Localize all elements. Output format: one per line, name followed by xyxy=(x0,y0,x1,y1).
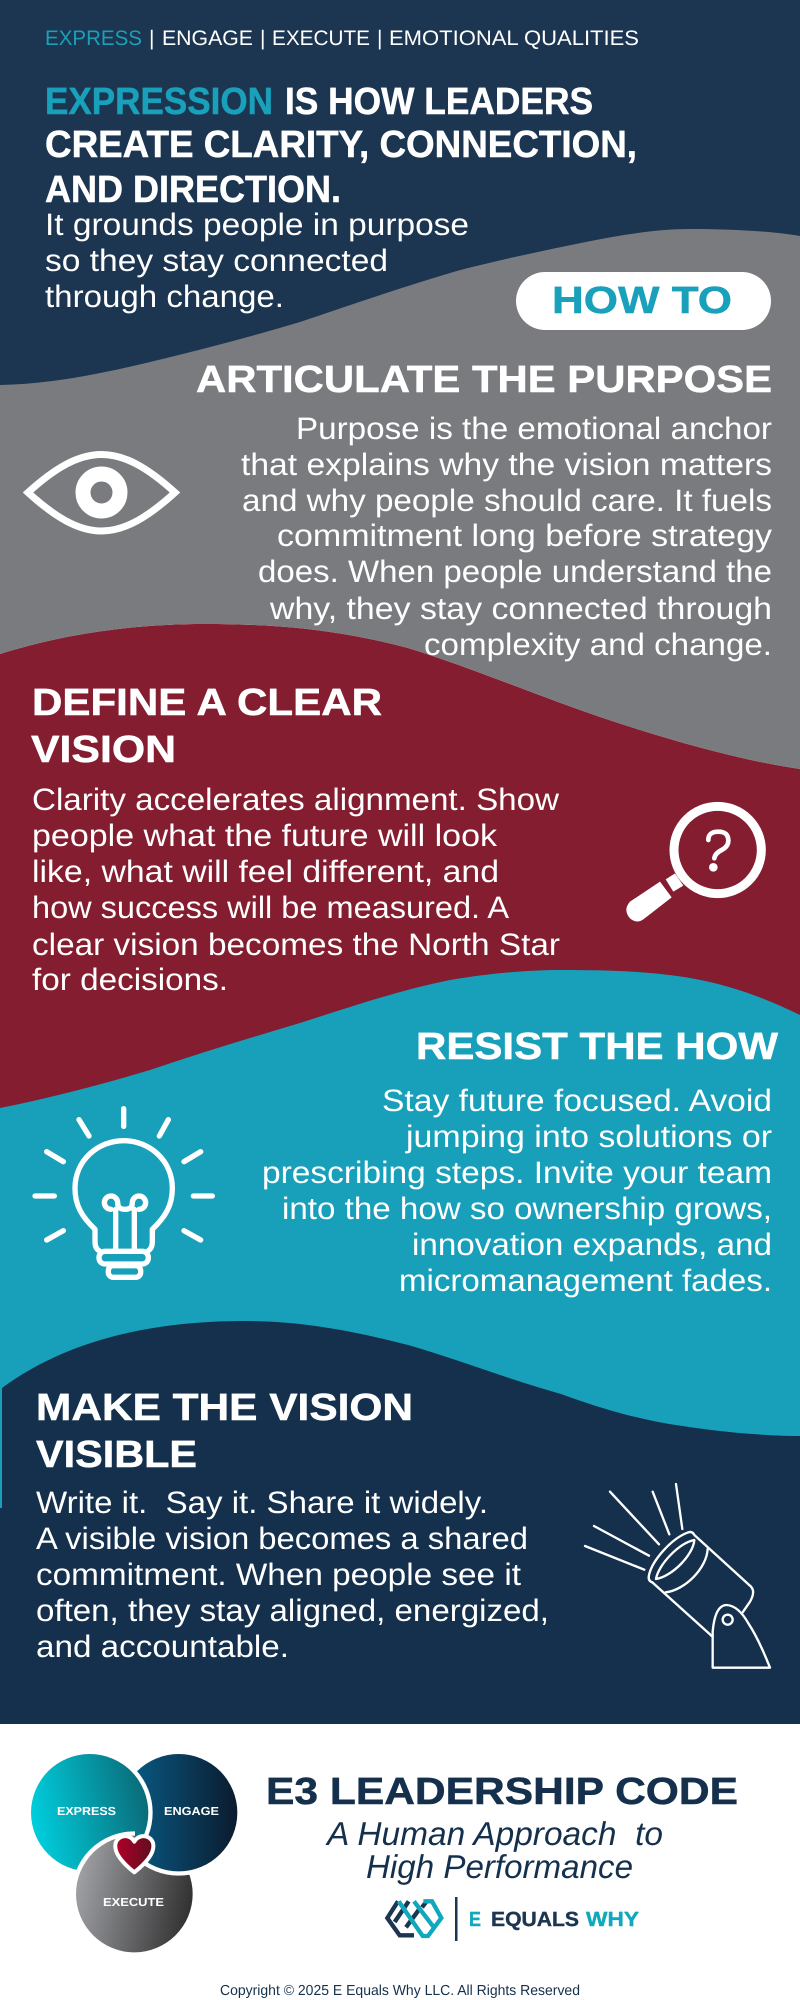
badge: how to: HOW TO xyxy=(552,280,732,322)
panel: make the vision visible xyxy=(0,1321,800,1724)
subtitle: A Human Approach to xyxy=(325,1815,663,1852)
icon: eye xyxy=(28,454,175,531)
body text: visible vision xyxy=(36,1485,549,1664)
label: execute: EXECUTE xyxy=(103,1896,164,1909)
logo: E Equals Why: WHY xyxy=(586,1908,639,1931)
body text: visible vision: and accountable. xyxy=(36,1629,289,1664)
body text: clear vision: how success will be measured. A xyxy=(32,890,509,925)
headline: IS HOW LEADERS xyxy=(285,81,593,123)
navigation breadcrumb: | xyxy=(149,27,154,50)
heading: define a clear vision: VISION xyxy=(31,729,176,771)
body text: resist the how: into the how so ownership grows, xyxy=(282,1191,772,1226)
body text: purpose xyxy=(241,411,773,662)
body text: clear vision: like, what will feel different, and xyxy=(32,854,499,889)
body text: clear vision xyxy=(32,782,560,997)
heading: make the vision visible: VISIBLE xyxy=(36,1434,197,1476)
body text: purpose: that explains why the vision matters xyxy=(241,447,772,482)
headline: AND DIRECTION. xyxy=(45,169,341,211)
heading: define a clear vision: DEFINE A CLEAR xyxy=(32,682,382,724)
panel: intro header xyxy=(0,0,800,400)
subtitle: High Performance xyxy=(366,1848,633,1885)
body text: resist the how: prescribing steps. Invite your team xyxy=(262,1155,772,1190)
navigation breadcrumb: EMOTIONAL QUALITIES xyxy=(389,27,639,50)
intro text: so they stay connected xyxy=(45,243,388,278)
body text: resist the how xyxy=(262,1083,772,1298)
body text: resist the how: jumping into solutions or xyxy=(405,1119,772,1154)
body text: clear vision: people what the future will look xyxy=(32,818,498,853)
body text: purpose: commitment long before strategy xyxy=(277,518,773,553)
body text: purpose: and why people should care. It fuels xyxy=(242,483,772,518)
intro text xyxy=(45,207,469,314)
icon: magnifying glass with question mark xyxy=(626,806,761,921)
title: E3 leadership code: E3 LEADERSHIP CODE xyxy=(266,1771,738,1813)
body text: resist the how: innovation expands, and xyxy=(412,1227,772,1262)
navigation breadcrumb: | xyxy=(260,27,265,50)
body text: visible vision: often, they stay aligned, energized, xyxy=(36,1593,549,1628)
heading: articulate the purpose: ARTICULATE THE PURPOSE xyxy=(196,359,772,401)
body text: resist the how: micromanagement fades. xyxy=(399,1263,772,1298)
body text: purpose: complexity and change. xyxy=(424,627,772,662)
label: engage: ENGAGE xyxy=(164,1805,219,1818)
heading: make the vision visible xyxy=(36,1387,413,1476)
diagram: E3 venn with heart xyxy=(31,1754,237,1952)
navigation breadcrumb: | xyxy=(377,27,382,50)
headline: EXPRESSION xyxy=(45,81,273,123)
logo: E Equals Why xyxy=(387,1897,639,1941)
panel: define a clear vision xyxy=(0,624,800,1120)
navigation breadcrumb: EXPRESS xyxy=(45,27,142,50)
body text: visible vision: commitment. When people see it xyxy=(36,1557,521,1592)
body text: clear vision: for decisions. xyxy=(32,962,228,997)
headline: CREATE CLARITY, CONNECTION, xyxy=(45,124,637,166)
logo: E Equals Why: EQUALS xyxy=(491,1908,579,1931)
icon: light bulb xyxy=(35,1109,212,1277)
body text: purpose: does. When people understand the xyxy=(258,554,772,589)
body text: resist the how: Stay future focused. Avoid xyxy=(382,1083,772,1118)
logo: E Equals Why: E xyxy=(469,1908,481,1931)
heading: resist the how: RESIST THE HOW xyxy=(416,1026,778,1068)
navigation breadcrumb: ENGAGE xyxy=(162,27,253,50)
copyright: Copyright © 2025 E Equals Why LLC. All Rights Reserved xyxy=(220,1983,580,1999)
body text: clear vision: clear vision becomes the North Star xyxy=(32,927,560,962)
body text: visible vision: A visible vision becomes a shared xyxy=(36,1521,528,1556)
headline xyxy=(45,81,637,211)
navigation breadcrumb xyxy=(45,27,639,50)
badge: how to xyxy=(516,272,771,330)
label: express: EXPRESS xyxy=(57,1805,116,1818)
body text: visible vision: Write it. Say it. Share it widely. xyxy=(36,1485,488,1520)
navigation breadcrumb: EXECUTE xyxy=(272,27,370,50)
body text: purpose: why, they stay connected through xyxy=(269,591,772,626)
heading: make the vision visible: MAKE THE VISION xyxy=(36,1387,413,1429)
heading: define a clear vision xyxy=(31,682,382,771)
panel: footer xyxy=(31,1754,737,1998)
body text: purpose: Purpose is the emotional anchor xyxy=(296,411,772,446)
subtitle xyxy=(325,1815,663,1885)
intro text: It grounds people in purpose xyxy=(45,207,469,242)
intro text: through change. xyxy=(45,279,284,314)
panel: resist the how xyxy=(0,970,800,1520)
body text: clear vision: Clarity accelerates alignment. Show xyxy=(32,782,560,817)
panel: articulate the purpose xyxy=(0,229,800,769)
icon: spotlight xyxy=(585,1484,770,1668)
